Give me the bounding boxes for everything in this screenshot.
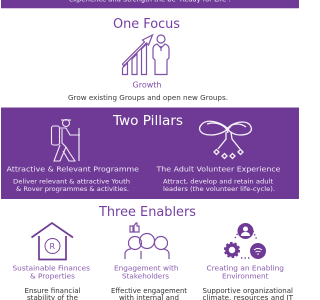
text: Engagement with Stakeholders: Engagement with (114, 264, 178, 272)
heading: Two Pillars: Two Pillars (112, 113, 183, 129)
text: Attractive and Relevant Programme: Attractive & Relevant Programme (6, 166, 139, 174)
panel: Two Pillars (1, 107, 299, 199)
text: programme description line 1: Deliver relevant & attractive Youth (13, 178, 130, 186)
icon: house with R: R (50, 242, 56, 251)
text: Engagement with Stakeholders (114, 264, 178, 280)
text: finances description: Ensure financial (24, 287, 81, 295)
text: Sustainable Finances and Properties: & Properties (30, 272, 75, 280)
text: Creating an Enabling Environment (206, 264, 284, 280)
text: finances description (24, 287, 81, 300)
icon: hiker (52, 120, 80, 161)
text: engagement description: Effective engagement (111, 287, 187, 295)
icon: house with R (32, 223, 73, 260)
top banner (1, 0, 299, 9)
text: growth description: Grow existing Groups and open new Groups. (68, 94, 228, 102)
text: volunteer description line 1: Attract, develop and retain adult (163, 178, 274, 186)
text: Sustainable Finances and Properties: Sustainable Finances (12, 264, 90, 272)
text: Creating an Enabling Environment: Creating an Enabling (206, 264, 284, 272)
label: Growth: Growth (132, 80, 162, 90)
text: Sustainable Finances and Properties (12, 264, 90, 280)
text: programme description line 2: & Rover programmes & activities. (16, 186, 129, 193)
icon: growth chart and person (122, 35, 169, 74)
text: environment description: Supportive organizational (202, 287, 293, 295)
text: The Adult Volunteer Experience: The Adult Volunteer Experience (155, 166, 280, 174)
text: engagement description (111, 287, 187, 300)
icon: stakeholders with thumbs up (125, 223, 169, 259)
text: Creating an Enabling Environment: Environment (222, 272, 269, 280)
heading: One Focus: One Focus (113, 16, 180, 32)
text: environment description (202, 287, 294, 300)
heading: Three Enablers: Three Enablers (98, 204, 196, 220)
icon: knot (200, 121, 251, 158)
text: Engagement with Stakeholders: Stakeholders (122, 272, 169, 280)
text: volunteer description line 2: leaders (the volunteer life-cycle). (163, 186, 275, 193)
icon: person, gear and wifi (225, 223, 266, 259)
